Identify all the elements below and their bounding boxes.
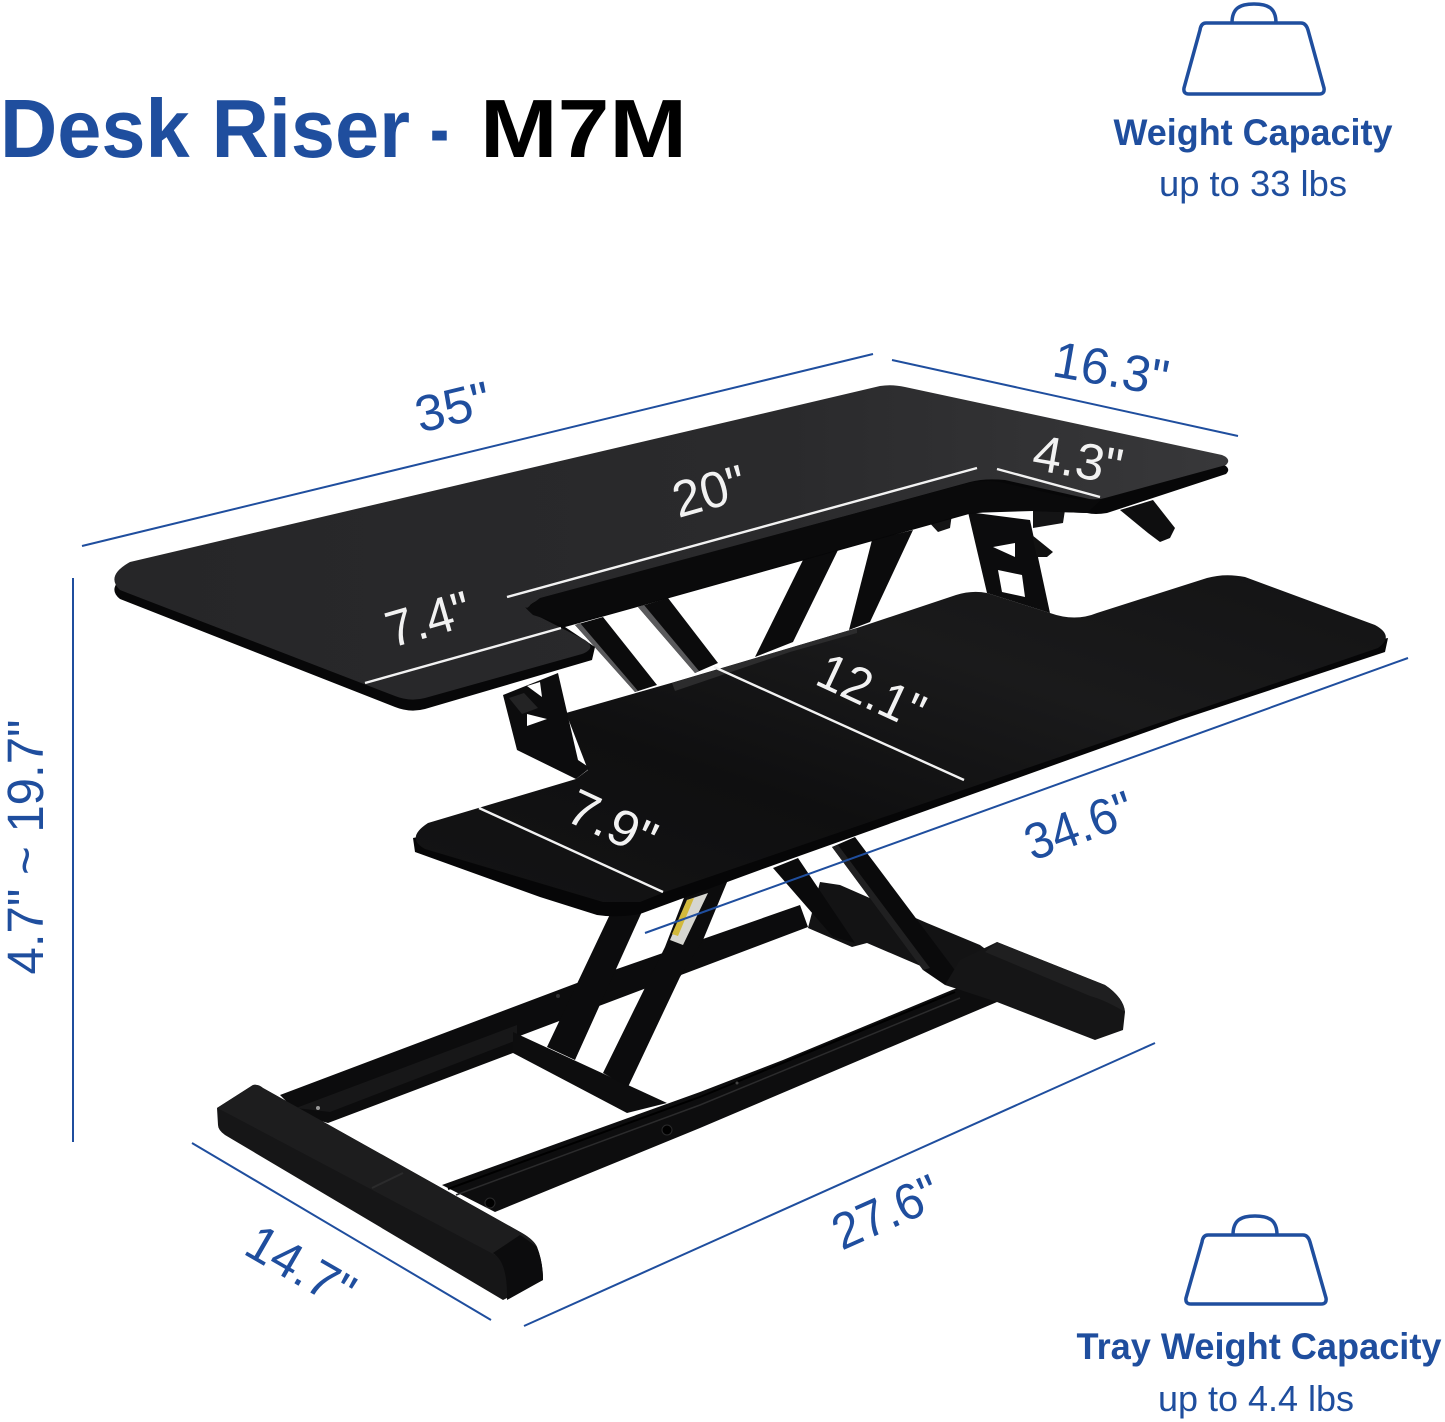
white dimension labels: 20" bbox=[666, 454, 753, 529]
left arm two bbox=[638, 598, 718, 673]
blue dimension labels: 27.6" bbox=[823, 1163, 949, 1261]
weight capacity callout: Weight Capacity bbox=[1114, 112, 1393, 153]
right riser bracket bbox=[968, 508, 1065, 613]
title bbox=[0, 82, 687, 175]
hinge knob bbox=[925, 514, 952, 532]
weight capacity callout: up to 33 lbs bbox=[1159, 163, 1347, 204]
blue dimension labels: 14.7" bbox=[236, 1213, 365, 1321]
title: - bbox=[430, 82, 449, 175]
right arm two bbox=[849, 530, 913, 630]
weight capacity callout bbox=[1114, 4, 1393, 204]
tray back lip bbox=[672, 628, 857, 691]
near rail bbox=[442, 980, 997, 1212]
adjustment handle bbox=[1120, 500, 1175, 542]
tray weight capacity callout: up to 4.4 lbs bbox=[1158, 1378, 1354, 1419]
far rail bbox=[280, 905, 808, 1123]
left arm one bbox=[575, 617, 657, 692]
right arm one bbox=[755, 548, 839, 657]
tray edge bbox=[413, 638, 1388, 916]
white dimension labels: 4.3" bbox=[1029, 424, 1127, 496]
tray surface bbox=[416, 575, 1386, 902]
left riser bracket bbox=[503, 673, 590, 779]
tray weight capacity callout bbox=[1076, 1216, 1442, 1419]
white dimension labels bbox=[379, 424, 1127, 868]
tray weight capacity callout: Tray Weight Capacity bbox=[1076, 1326, 1442, 1367]
rear foot inner block bbox=[808, 882, 1000, 990]
blue dimension lines bbox=[73, 354, 1408, 1326]
right rear foot bbox=[945, 942, 1125, 1040]
warning label bbox=[670, 893, 708, 945]
title: Desk Riser bbox=[0, 82, 410, 175]
blue dimension labels: 35" bbox=[409, 370, 497, 444]
base frame bbox=[217, 837, 1125, 1300]
upper scissor legs bbox=[575, 514, 952, 692]
blue dimension labels bbox=[0, 331, 1173, 1321]
white dimension labels: 7.9" bbox=[559, 778, 666, 868]
fascia bbox=[525, 481, 1102, 625]
keyboard tray bbox=[413, 575, 1388, 916]
desk surface bbox=[114, 385, 1228, 700]
icon: tray weight bag bbox=[1186, 1216, 1326, 1304]
front arm left bbox=[547, 905, 645, 1060]
rear scissor arm front bbox=[832, 837, 960, 985]
icon: weight bag bbox=[1184, 4, 1324, 94]
desk riser product bbox=[114, 385, 1388, 1300]
lower scissor legs bbox=[547, 875, 730, 1087]
white dimension lines bbox=[365, 468, 1100, 892]
cross bar bbox=[513, 1032, 667, 1113]
left front foot bbox=[217, 1085, 543, 1300]
title: M7M bbox=[480, 82, 687, 175]
white dimension labels: 7.4" bbox=[379, 580, 477, 658]
blue dimension labels: 16.3" bbox=[1049, 331, 1173, 407]
rear scissor arm back bbox=[773, 858, 855, 943]
white dimension labels: 12.1" bbox=[809, 642, 934, 741]
front arm right bbox=[603, 875, 730, 1087]
top desk bbox=[114, 385, 1228, 711]
blue dimension labels: 34.6" bbox=[1017, 780, 1141, 871]
desk edge bbox=[114, 395, 1228, 711]
